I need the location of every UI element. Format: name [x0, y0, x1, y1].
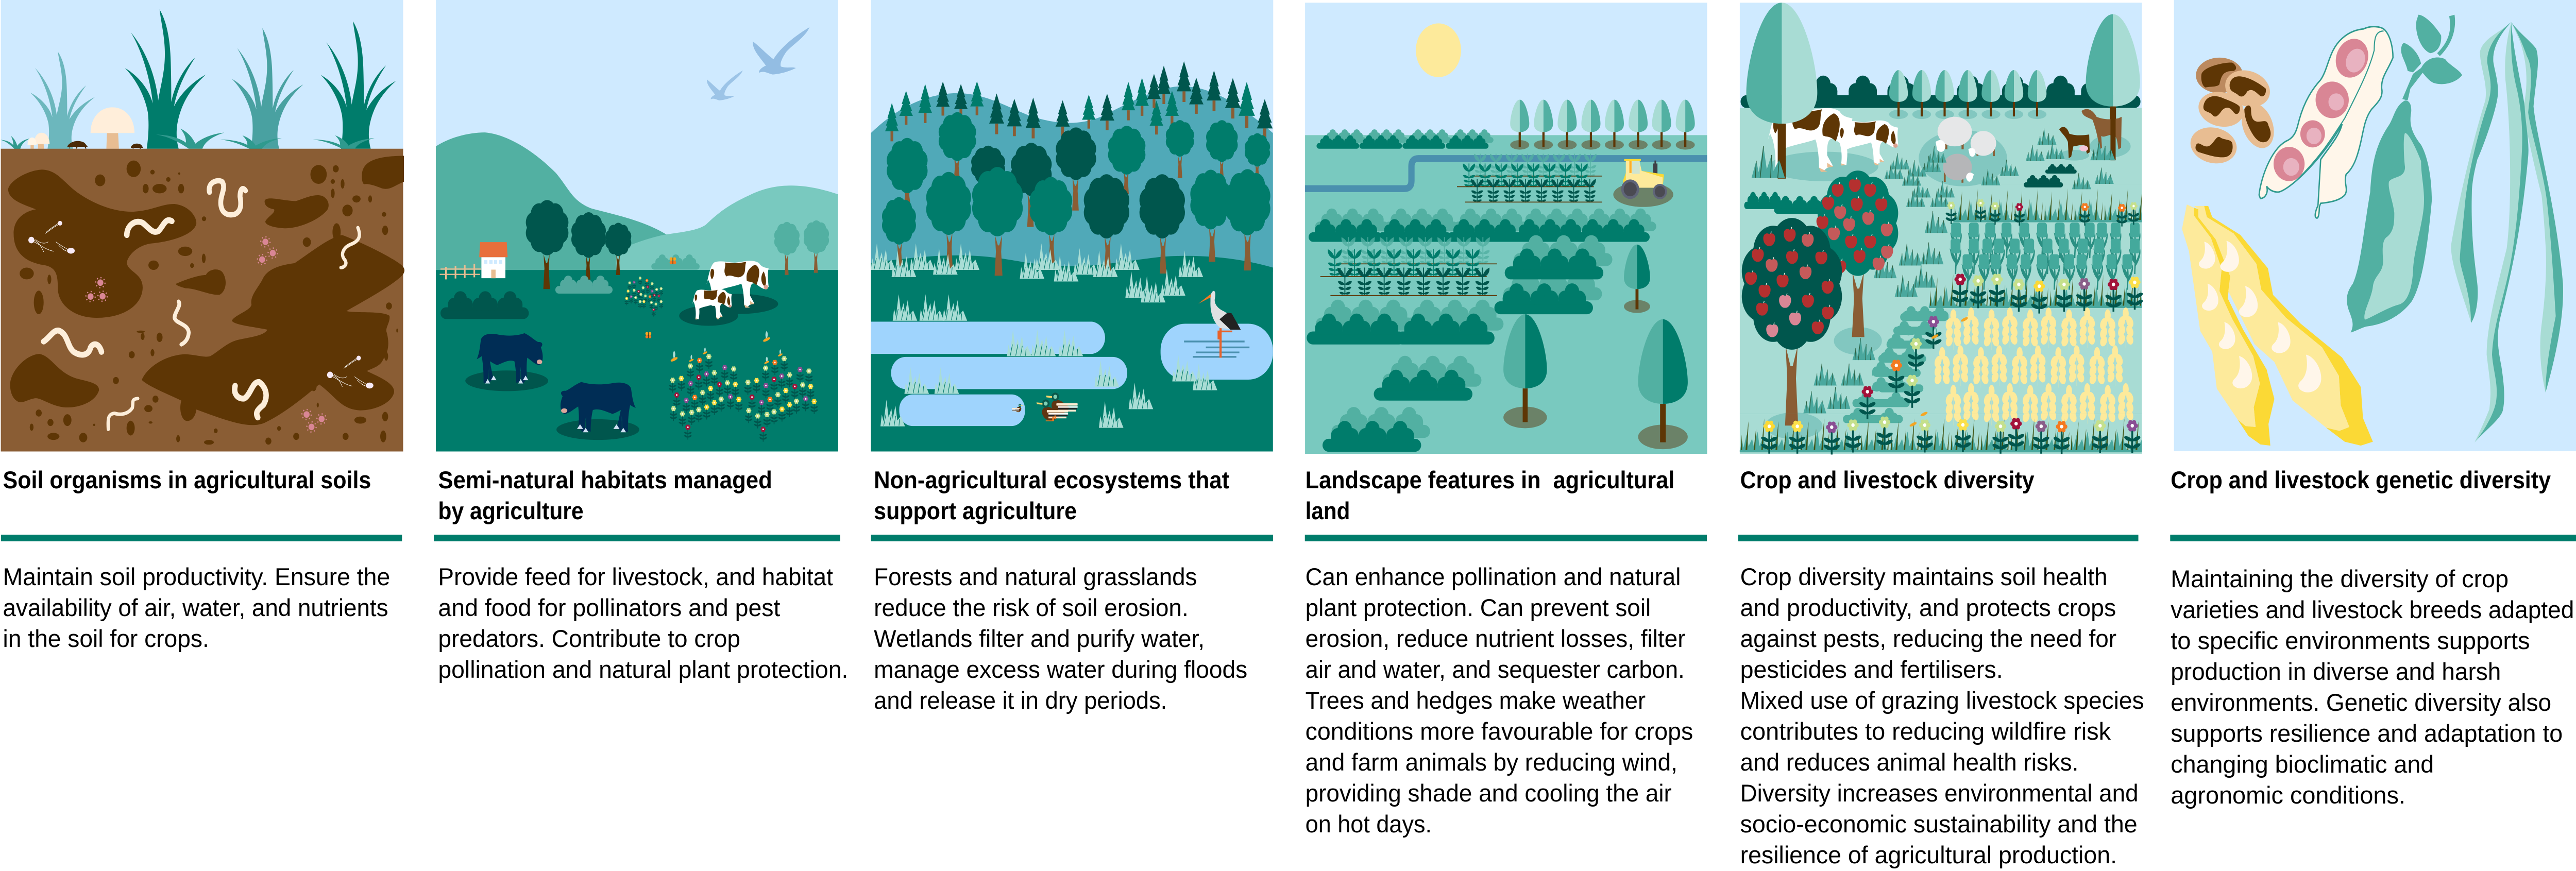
column 2 description [438, 563, 848, 683]
conifer forest [885, 61, 1273, 141]
panel: crop and livestock genetic diversity illustration [2174, 0, 2576, 451]
column 5 description: pesticides and fertilisers. [1740, 656, 2003, 683]
panel: landscape features illustration [1305, 3, 1707, 454]
column 2 description: pollination and natural plant protection. [438, 656, 848, 683]
column 6 description: supports resilience and adaptation to [2171, 720, 2563, 747]
scattered grass [1752, 129, 2115, 297]
pink microorganisms [86, 237, 326, 432]
column 4 description: plant protection. Can prevent soil [1306, 594, 1651, 621]
birds [707, 27, 809, 100]
column 5 description: resilience of agricultural production. [1740, 841, 2117, 868]
brown speckled beans [2188, 58, 2280, 167]
column 3 description: and release it in dry periods. [874, 687, 1167, 714]
column 4 heading [1306, 466, 1674, 524]
column 2 heading [438, 466, 772, 524]
meadow flowers [1760, 199, 2144, 454]
wildflower patches [624, 277, 818, 442]
column 5 heading: Crop and livestock diversity [1740, 466, 2035, 493]
broadleaf trees [882, 112, 1270, 276]
green pod with leaves [2347, 15, 2462, 332]
panel: crop and livestock diversity illustration [1740, 3, 2144, 454]
column 6 description: Maintaining the diversity of crop [2171, 565, 2509, 592]
cows [1768, 108, 1898, 181]
column 6 description: environments. Genetic diversity also [2171, 689, 2551, 716]
column 5 description: against pests, reducing the need for [1740, 625, 2116, 652]
sheep [1919, 117, 2007, 186]
column 4 description [1306, 563, 1693, 838]
column 4 rule [1305, 535, 1707, 541]
yellow pods [2182, 204, 2373, 446]
pond ripples [1184, 341, 1249, 357]
grass bands [1740, 184, 2142, 452]
column 3 rule [871, 535, 1273, 541]
ducks [1012, 392, 1078, 421]
grass tufts above ground [1, 9, 396, 149]
column 5 description: socio-economic sustainability and the [1740, 810, 2138, 838]
bees [1909, 311, 1969, 428]
wetland ponds [871, 322, 1273, 426]
apple trees [1742, 170, 1898, 439]
column 5 description: Crop diversity maintains soil health [1740, 563, 2108, 590]
column 5 description [1740, 563, 2144, 868]
column 3 heading [874, 466, 1229, 524]
column 4 description: erosion, reduce nutrient losses, filter [1306, 625, 1686, 652]
trees [526, 200, 829, 289]
column 2 heading: Semi-natural habitats managed [438, 466, 772, 493]
column 4 description: and farm animals by reducing wind, [1306, 748, 1677, 776]
column 5 description: Diversity increases environmental and [1740, 779, 2139, 807]
column 1 heading: Soil organisms in agricultural soils [3, 466, 371, 493]
column 4 description: on hot days. [1306, 810, 1432, 838]
brown and white cows [679, 261, 778, 326]
column 4 description: Trees and hedges make weather [1306, 687, 1646, 714]
lower scattered grass [1803, 338, 1875, 413]
tractor [1613, 159, 1673, 207]
column 1 description: in the soil for crops. [3, 625, 209, 652]
column 1 description [3, 563, 390, 652]
foreground trees [1503, 245, 1688, 449]
mushrooms [27, 107, 134, 149]
column 6 description: changing bioclimatic and [2171, 750, 2434, 778]
panel: non-agricultural ecosystems illustration [871, 0, 1273, 451]
column 3 description [874, 563, 1247, 714]
stream [1305, 159, 1707, 189]
column 4 description: Can enhance pollination and natural [1306, 563, 1681, 590]
dark cows [465, 333, 639, 440]
column 3 description: manage excess water during floods [874, 656, 1247, 683]
stork [1198, 291, 1241, 358]
column 2 rule [434, 535, 840, 541]
panel: semi-natural habitats illustration [436, 0, 838, 451]
reeds [871, 243, 1217, 428]
panel: soil organisms illustration [1, 0, 404, 451]
large hedges [1307, 235, 1613, 452]
small hedges [1744, 164, 2077, 214]
far hedgerow [1316, 129, 1494, 149]
column 4 description: conditions more favourable for crops [1306, 718, 1693, 745]
column 6 description: agronomic conditions. [2171, 781, 2405, 809]
hills [436, 132, 838, 270]
bell-shaped crop rows [1950, 223, 2141, 290]
column 2 description: and food for pollinators and pest [438, 594, 781, 621]
crop strip 2 [1320, 237, 1497, 296]
column 3 description: Wetlands filter and purify water, [874, 625, 1205, 652]
column 2 description: predators. Contribute to crop [438, 625, 740, 652]
tall trees [1747, 3, 2140, 189]
column 4 heading: land [1306, 497, 1350, 524]
pollinating insects [646, 257, 771, 364]
row of small trees [1889, 70, 2046, 119]
crop strip 1 [1457, 153, 1602, 202]
beetles [67, 141, 143, 151]
tree row [1510, 99, 1695, 149]
column 4 description: providing shade and cooling the air [1306, 779, 1672, 807]
column 5 description: Mixed use of grazing livestock species [1740, 687, 2144, 714]
dark soil patches [8, 156, 404, 445]
column 5 rule [1738, 535, 2139, 541]
bacteria [28, 221, 374, 388]
background hedge [1740, 76, 2141, 108]
white pod with pink beans [2259, 27, 2393, 218]
column 6 description [2171, 565, 2574, 809]
sun [1416, 23, 1461, 77]
column 2 description: Provide feed for livestock, and habitat [438, 563, 833, 590]
fence [439, 264, 481, 279]
column 6 description: varieties and livestock breeds adapted [2171, 596, 2574, 623]
column 2 heading: by agriculture [438, 497, 584, 524]
column 5 description: contributes to reducing wildfire risk [1740, 718, 2111, 745]
flowering hedge steps [1843, 306, 1948, 423]
hedges [440, 254, 700, 319]
long hedgerow [1309, 209, 1656, 242]
column 6 heading: Crop and livestock genetic diversity [2171, 466, 2551, 493]
column 1 description: availability of air, water, and nutrients [3, 594, 388, 621]
goats [2059, 107, 2131, 161]
column 1 rule [1, 535, 402, 541]
column 5 description: and reduces animal health risks. [1740, 748, 2078, 776]
column 3 description: Forests and natural grasslands [874, 563, 1197, 590]
column 6 rule [2170, 535, 2576, 541]
column 3 heading: support agriculture [874, 497, 1077, 524]
column 3 description: reduce the risk of soil erosion. [874, 594, 1189, 621]
bottom band repeat over wheat [1740, 414, 2142, 452]
column 1 description: Maintain soil productivity. Ensure the [3, 563, 390, 590]
column 4 description: air and water, and sequester carbon. [1306, 656, 1685, 683]
farmhouse [479, 242, 507, 278]
wheat field [1933, 308, 2134, 425]
column 5 description: and productivity, and protects crops [1740, 594, 2116, 621]
long thin beans [2451, 22, 2563, 442]
column 6 description: to specific environments supports [2171, 627, 2530, 654]
column 3 heading: Non-agricultural ecosystems that [874, 466, 1229, 493]
earthworms [44, 181, 360, 429]
column 6 description: production in diverse and harsh [2171, 658, 2501, 685]
column 4 heading: Landscape features in agricultural [1306, 466, 1674, 493]
